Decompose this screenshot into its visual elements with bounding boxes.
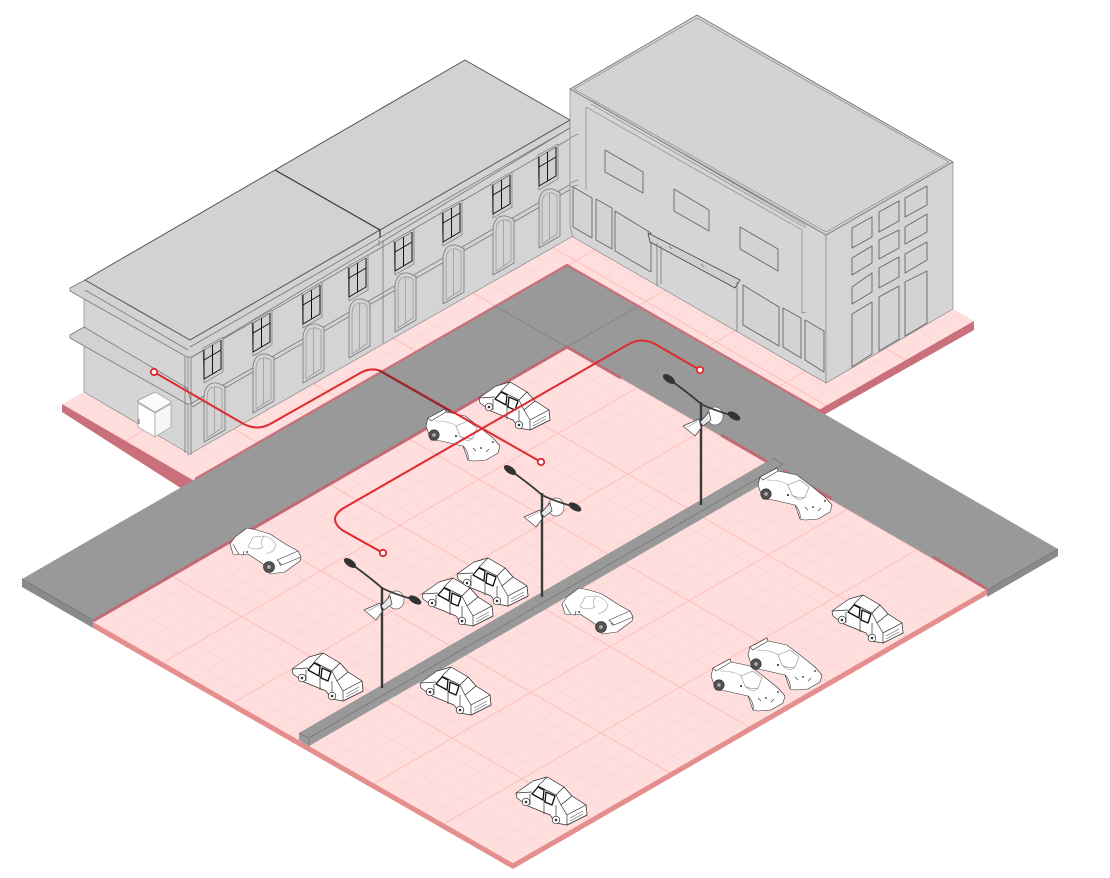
median strip bbox=[299, 458, 783, 746]
parapet dividing line bbox=[275, 170, 380, 238]
building: two-storey terrace bbox=[70, 60, 578, 455]
sports car bbox=[748, 638, 822, 690]
sports car bbox=[230, 528, 301, 574]
red cable route one bbox=[151, 369, 544, 465]
sidewalk behind the buildings bbox=[62, 228, 974, 494]
road outline at ends bbox=[22, 549, 1058, 620]
sidewalk surface bbox=[62, 228, 974, 487]
building: corner shop block bbox=[570, 15, 953, 383]
curb strips between road and lot bbox=[93, 347, 987, 621]
street lamp bbox=[342, 556, 423, 688]
curb strip between road and back sidewalk bbox=[195, 265, 822, 479]
side wall bbox=[84, 288, 188, 453]
road surface bbox=[22, 265, 1058, 620]
sedan bbox=[457, 558, 528, 606]
electric cabinet bbox=[137, 392, 172, 437]
sedan bbox=[420, 667, 491, 715]
cornice lines on walls bbox=[85, 128, 578, 455]
entrance door posts bbox=[657, 243, 737, 332]
side wall bbox=[826, 162, 953, 383]
sports car bbox=[426, 409, 500, 461]
sedan bbox=[292, 653, 363, 701]
roof bbox=[570, 15, 953, 235]
lot front curb bbox=[93, 589, 987, 869]
sidewalk curb: right section bbox=[818, 321, 974, 416]
upper rectangular windows bbox=[605, 150, 778, 271]
sports car bbox=[758, 468, 832, 520]
street lamp bbox=[502, 463, 583, 597]
sidewalk curb: left section bbox=[62, 404, 205, 494]
arched lower windows bbox=[204, 189, 560, 442]
parking lot bbox=[93, 347, 987, 869]
lot surface with grid bbox=[93, 347, 987, 863]
road bbox=[22, 265, 1058, 628]
red cable route two bbox=[335, 340, 703, 556]
side wall window grid bbox=[852, 186, 927, 367]
sedan bbox=[832, 595, 903, 643]
entrance awning bbox=[648, 233, 740, 288]
sedan bbox=[422, 578, 493, 626]
storefront panels bbox=[573, 187, 824, 372]
street lamp bbox=[661, 372, 742, 505]
front wall bbox=[570, 89, 826, 383]
cars bbox=[230, 382, 903, 825]
road side faces bbox=[22, 549, 1058, 628]
road seams bbox=[497, 307, 637, 347]
sedan bbox=[479, 382, 550, 430]
connecting cornice stubs between buildings bbox=[570, 134, 578, 187]
sedan bbox=[516, 777, 587, 825]
upper facade panel bbox=[586, 101, 807, 313]
middle cornice on side wall bbox=[70, 327, 192, 404]
roof bbox=[85, 60, 570, 340]
sports car bbox=[711, 659, 785, 711]
sports car bbox=[562, 588, 633, 634]
upper windows bbox=[203, 144, 558, 383]
front wall bbox=[188, 122, 575, 455]
roof inset bbox=[574, 18, 949, 232]
upper cornice bbox=[70, 120, 570, 357]
